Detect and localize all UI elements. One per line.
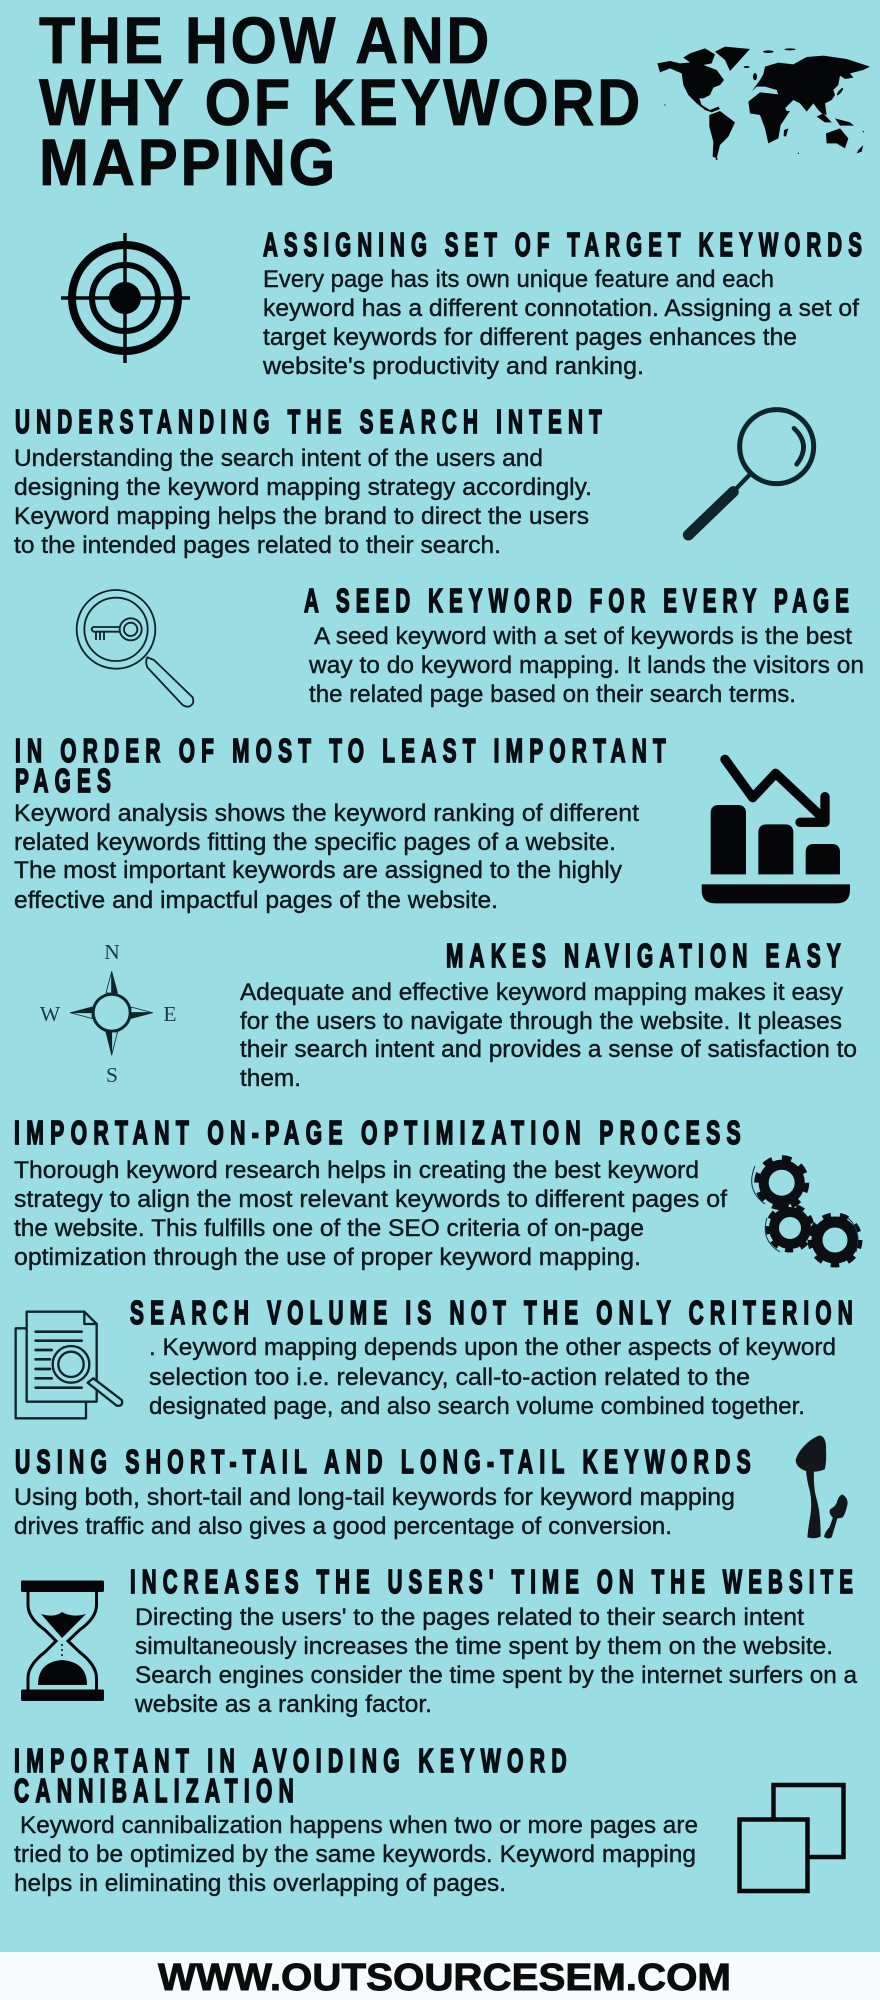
title: THE HOW AND (39, 3, 492, 77)
panel: important on-page optimization process (14, 1115, 860, 1271)
panel: important in avoiding keyword cannibalization (14, 1743, 844, 1897)
panel: search volume is not the only criterion (16, 1295, 859, 1420)
body text (262, 266, 859, 380)
body text: Adequate and effective keyword mapping makes it easy (240, 979, 843, 1006)
body text (134, 1604, 858, 1718)
body text: their search intent and provides a sense of satisfaction to (240, 1036, 857, 1063)
body text: related keywords fitting the specific pages of a website. (14, 829, 616, 856)
icon: magnifying glass (688, 410, 814, 535)
body text: target keywords for different pages enhances the (263, 324, 797, 351)
footer url: WWW.OUTSOURCESEM.COM (158, 1957, 731, 1999)
icon: target (61, 233, 190, 363)
icon: world map (657, 47, 870, 160)
body text: Keyword mapping helps the brand to direct the users (14, 503, 589, 530)
body text: Using both, short-tail and long-tail keywords for keyword mapping (14, 1484, 735, 1511)
body text: keyword has a different connotation. Assigning a set of (263, 295, 859, 322)
body text: website as a ranking factor. (134, 1691, 432, 1718)
icon: compass: W (40, 1002, 61, 1026)
body text: The most important keywords are assigned to the highly (14, 857, 622, 884)
icon: compass: E (163, 1002, 177, 1026)
body text: for the users to navigate through the website. It pleases (240, 1008, 842, 1035)
panel: increases the users' time on the website (21, 1564, 859, 1718)
body text: tried to be optimized by the same keywords. Keyword mapping (14, 1841, 696, 1868)
icon: compass (40, 940, 177, 1087)
body text (240, 979, 857, 1092)
body text (14, 445, 592, 559)
body text: helps in eliminating this overlapping of pages. (14, 1870, 506, 1897)
title: MAPPING (39, 125, 338, 199)
body text: website's productivity and ranking. (262, 353, 644, 380)
icon: gears (752, 1158, 860, 1265)
body text (14, 1812, 698, 1897)
title (39, 3, 643, 199)
body text: . Keyword mapping depends upon the other aspects of keyword (149, 1334, 836, 1361)
body text: optimization through the use of proper keyword mapping. (14, 1244, 641, 1271)
icon: document with magnifier (16, 1312, 122, 1418)
body text: them. (240, 1065, 301, 1092)
body text: Understanding the search intent of the users and (14, 445, 543, 472)
heading (15, 733, 672, 800)
body text: Every page has its own unique feature and each (263, 266, 774, 293)
icon: overlapping pages (740, 1785, 844, 1891)
panel: using short-tail and long-tail keywords (14, 1435, 848, 1540)
body text: Keyword analysis shows the keyword ranking of different (14, 800, 639, 827)
body text (14, 800, 639, 914)
body text: Keyword cannibalization happens when two or more pages are (20, 1812, 698, 1839)
body text: the related page based on their search terms. (309, 681, 796, 708)
body text (149, 1334, 836, 1420)
panel: understanding the search intent (14, 404, 814, 559)
body text: A seed keyword with a set of keywords is the best (314, 623, 852, 650)
icon: mushrooms (long tail) (796, 1435, 848, 1539)
body text: to the intended pages related to their search. (14, 532, 501, 559)
heading: CANNIBALIZATION (14, 1773, 300, 1810)
body text: strategy to align the most relevant keywords to different pages of (14, 1186, 727, 1213)
panel: assigning set of target keywords (61, 227, 868, 380)
body text: drives traffic and also gives a good percentage of conversion. (14, 1513, 672, 1540)
body text: way to do keyword mapping. It lands the visitors on (308, 652, 864, 679)
heading: IMPORTANT IN AVOIDING KEYWORD (14, 1743, 573, 1780)
icon: key in magnifier (77, 590, 193, 707)
body text: designated page, and also search volume combined together. (149, 1393, 805, 1420)
icon: compass: S (106, 1063, 118, 1087)
body text (14, 1157, 727, 1271)
panel: makes navigation easy (40, 938, 857, 1092)
title: WHY OF KEYWORD (39, 65, 643, 139)
body text: Thorough keyword research helps in creating the best keyword (14, 1157, 699, 1184)
body text: simultaneously increases the time spent by them on the website. (135, 1633, 833, 1660)
panel: in order of most to least important pages (14, 733, 850, 914)
body text: selection too i.e. relevancy, call-to-action related to the (149, 1364, 750, 1391)
body text: effective and impactful pages of the website. (14, 887, 498, 914)
body text: Directing the users' to the pages related to their search intent (135, 1604, 804, 1631)
panel: a seed keyword for every page (77, 583, 864, 708)
footer band (0, 1952, 880, 2000)
body text: the website. This fulfills one of the SEO criteria of on-page (14, 1215, 644, 1242)
body text (308, 623, 864, 708)
heading (14, 1743, 573, 1810)
icon: hourglass (21, 1580, 104, 1701)
icon: declining bar chart (702, 759, 850, 903)
body text: Search engines consider the time spent by the internet surfers on a (135, 1662, 858, 1689)
body text (14, 1484, 735, 1540)
heading: PAGES (15, 763, 117, 800)
body text: designing the keyword mapping strategy accordingly. (14, 474, 592, 501)
icon: compass: N (104, 940, 120, 964)
